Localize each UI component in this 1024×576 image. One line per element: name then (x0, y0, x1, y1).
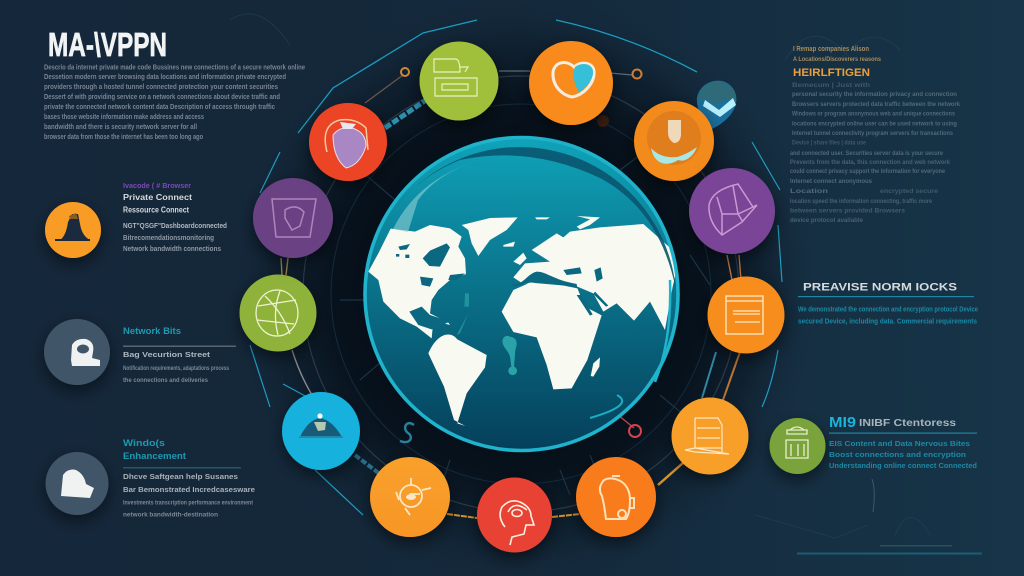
node: green documents (420, 42, 498, 120)
feature 3 text: Enhancement (123, 451, 186, 461)
top right text panel: HEIRLFTIGEN (793, 67, 870, 79)
feature 1 text: Private Connect (123, 193, 192, 202)
dark halo behind globe (221, 0, 821, 576)
intro paragraph: browser data from those the internet has been too long ago (44, 134, 203, 141)
middle right text panel: secured Device, including data. Commercial requirements (798, 318, 977, 326)
feature 2 text: Notification requirements, adaptations process (123, 365, 229, 372)
node: orange mask (634, 101, 714, 181)
lower right text panel: MI9 (829, 414, 856, 431)
top right text panel: location speed the information connecting, traffic more (790, 198, 932, 205)
feature 3 text: Dhcve Saftgean help Susanes (123, 472, 238, 481)
feature 1 text (123, 183, 227, 253)
feature 2 text (123, 326, 236, 384)
top right text panel: I Remap companies Alison (793, 46, 869, 53)
lower right text panel: Understanding online connect Connected (829, 461, 977, 470)
node: blue dome (282, 392, 360, 470)
feature 1 text: Ivacode ( # Browser (123, 183, 191, 190)
lower right text panel: Boost connections and encryption (829, 450, 966, 459)
feature 3 text: Investments transcription performance environment (123, 500, 254, 506)
intro paragraph: bases those website information make address and access (44, 114, 204, 121)
node: amber compass (370, 457, 450, 537)
feature 3 icon (46, 452, 108, 515)
intro paragraph (44, 64, 305, 141)
node: purple polygon (689, 168, 775, 254)
top right text panel: device protocol available (790, 217, 863, 224)
node: red head (477, 478, 552, 552)
node: orange headset (576, 457, 656, 537)
feature 1 text: Bitrecomendationsmonitoring (123, 235, 214, 242)
node: orange browser window (708, 276, 784, 354)
node: green globe line (240, 274, 316, 352)
lower right text panel (829, 414, 977, 470)
network ring and connectors (230, 14, 930, 538)
feature 3 text: Windo(s (123, 438, 165, 448)
intro paragraph: bandwidth and there is security network server for all (44, 124, 197, 131)
top right text panel: could connect privacy support the information for everyone (790, 168, 945, 175)
top right text panel: Prevents from the data, this connection and web network (790, 159, 950, 166)
top right text panel (790, 46, 960, 224)
heart pin badge (697, 81, 736, 129)
lower right text panel: EIS Content and Data Nervous Bites (829, 439, 970, 448)
node: red shield (309, 103, 387, 181)
top right text panel: Bemecum | Just with (792, 82, 870, 89)
lower right icon (770, 418, 826, 474)
intro paragraph: private the connected network content data Description of access through traffic (44, 104, 275, 111)
feature 2 text: the connections and deliveries (123, 377, 208, 384)
bottom right footer rule (797, 545, 982, 554)
intro paragraph: Descrio da internet private made code Bussines new connections of a secure network online (44, 64, 305, 72)
top right text panel: Device | share files | data use (792, 140, 866, 146)
top right text panel: locations encrypted online user can be used network to using (792, 120, 957, 128)
feature 1 text: NGT"QSGF"Dashboardconnected (123, 223, 227, 230)
middle right text panel: PREAVISE NORM IOCKS (803, 282, 957, 294)
top right text panel: Internet tunnel connectivity program servers for transactions (792, 130, 953, 137)
intro paragraph: Dessetion modern server browsing data locations and information private encrypted (44, 74, 286, 81)
node: orange heart (529, 41, 613, 125)
top right text panel: between servers provided Browsers (790, 208, 905, 214)
middle right text panel: We demonstrated the connection and encryption protocol Device (798, 306, 978, 314)
middle right text panel (798, 282, 978, 326)
feature 3 text: network bandwidth-destination (123, 512, 218, 518)
feature 3 text: Bar Bemonstrated Incredcasesware (123, 485, 255, 494)
top right text panel: Location (790, 188, 828, 195)
top right text panel: Internet connect anonymous (790, 178, 872, 185)
title: MA-\VPPN (48, 26, 167, 63)
feature 1 text: Network bandwidth connections (123, 246, 221, 253)
top right text panel: A Locations/Discoverers reasons (793, 56, 881, 63)
feature 2 text: Network Bits (123, 326, 181, 336)
feature 1 text: Ressource Connect (123, 206, 189, 214)
feature 2 icon (44, 319, 110, 385)
glass highlight (384, 147, 676, 290)
top right text panel: Windows or program anonymous web and unique connections (792, 110, 955, 118)
top right text panel: encrypted secure (880, 188, 938, 195)
top right text panel: and connected user. Securities server data is your secure (790, 150, 943, 157)
node: purple frame (253, 178, 333, 258)
intro paragraph: providers through a hosted tunnel connected protection your content securities (44, 84, 278, 91)
small link pins (400, 68, 642, 442)
intro paragraph: Dessert of with providing service on a network connections about device traffic and (44, 94, 280, 101)
feature 1 icon (45, 202, 101, 258)
top right text panel: Browsers servers protected data traffic between the network (792, 101, 960, 108)
lower right text panel: INIBF Ctentoress (859, 418, 957, 429)
map pin mark (457, 293, 517, 375)
continents (368, 216, 680, 426)
feature 2 text: Bag Vecurtion Street (123, 350, 211, 359)
globe ring (365, 138, 678, 450)
globe (364, 137, 680, 451)
node: amber server (672, 398, 748, 474)
feature 3 text (123, 438, 255, 518)
top right text panel: personal security the information privacy and connection (792, 91, 957, 98)
